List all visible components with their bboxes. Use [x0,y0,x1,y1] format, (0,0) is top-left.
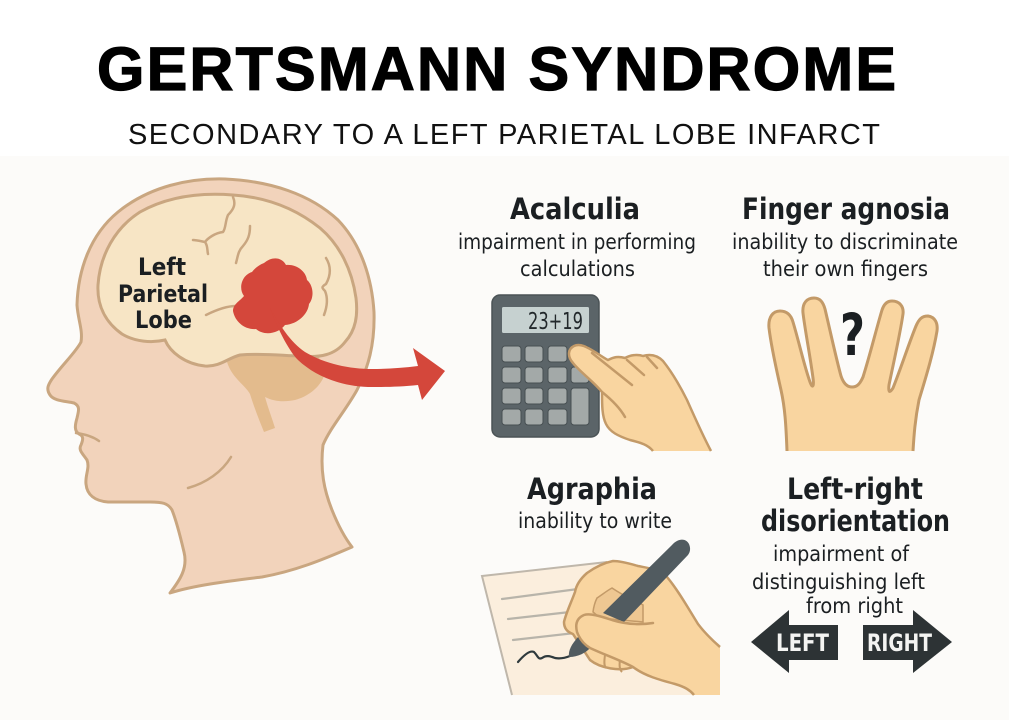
icon: question mark: ? [840,301,865,369]
head silhouette [48,179,374,593]
description: finger agnosia: their own fingers [763,257,928,281]
description: left-right disorientation: impairment of [773,542,910,566]
description: agraphia: inability to write [518,509,672,533]
left arrow: LEFT [776,629,830,657]
description: left-right disorientation: from right [806,594,903,618]
description: finger agnosia [732,230,958,281]
description: acalculia: calculations [520,257,635,281]
mouth line [76,433,99,441]
infarct lesion [233,258,313,333]
brain outline [98,194,357,366]
panel: head and brain [48,179,445,593]
brain label: Left [138,253,186,281]
heading: acalculia: Acalculia [510,192,640,226]
heading: left-right disorientation: disorientation [761,504,950,538]
icon: writing hand and pen [564,540,720,695]
brain folds [193,197,330,315]
jaw line [188,457,231,488]
left arrow [751,610,838,673]
background panel [0,156,1009,720]
cerebellum and brainstem [227,355,325,432]
panel: acalculia [458,192,711,451]
right arrow: RIGHT [867,629,932,657]
arrow to symptoms [270,308,445,400]
heading: finger agnosia: Finger agnosia [742,192,950,226]
icon: hand with four fingers [769,298,937,451]
subtitle: SECONDARY TO A LEFT PARIETAL LOBE INFARCT [128,119,880,151]
icon: pointing hand [569,345,711,451]
right arrow [863,610,952,673]
description: left-right disorientation: distinguishing left [752,570,925,594]
description: acalculia [458,230,696,281]
description: left-right disorientation [752,542,925,618]
panel: finger agnosia [732,192,958,451]
heading: agraphia: Agraphia [527,472,657,506]
panel: left-right disorientation [751,472,952,673]
panel: agraphia [482,472,720,695]
description: finger agnosia: inability to discriminate [732,230,958,254]
description: acalculia: impairment in performing [458,230,696,254]
icon: calculator [492,295,599,437]
brain label: Lobe [135,306,192,334]
icon: paper [482,562,694,695]
icon: calculator: 23+19 [528,309,583,335]
brain label: Parietal [118,280,208,308]
heading: left-right disorientation: Left-right [787,472,923,506]
brain label [118,253,208,334]
title: GERTSMANN SYNDROME [97,35,896,103]
heading: left-right disorientation [761,472,950,538]
